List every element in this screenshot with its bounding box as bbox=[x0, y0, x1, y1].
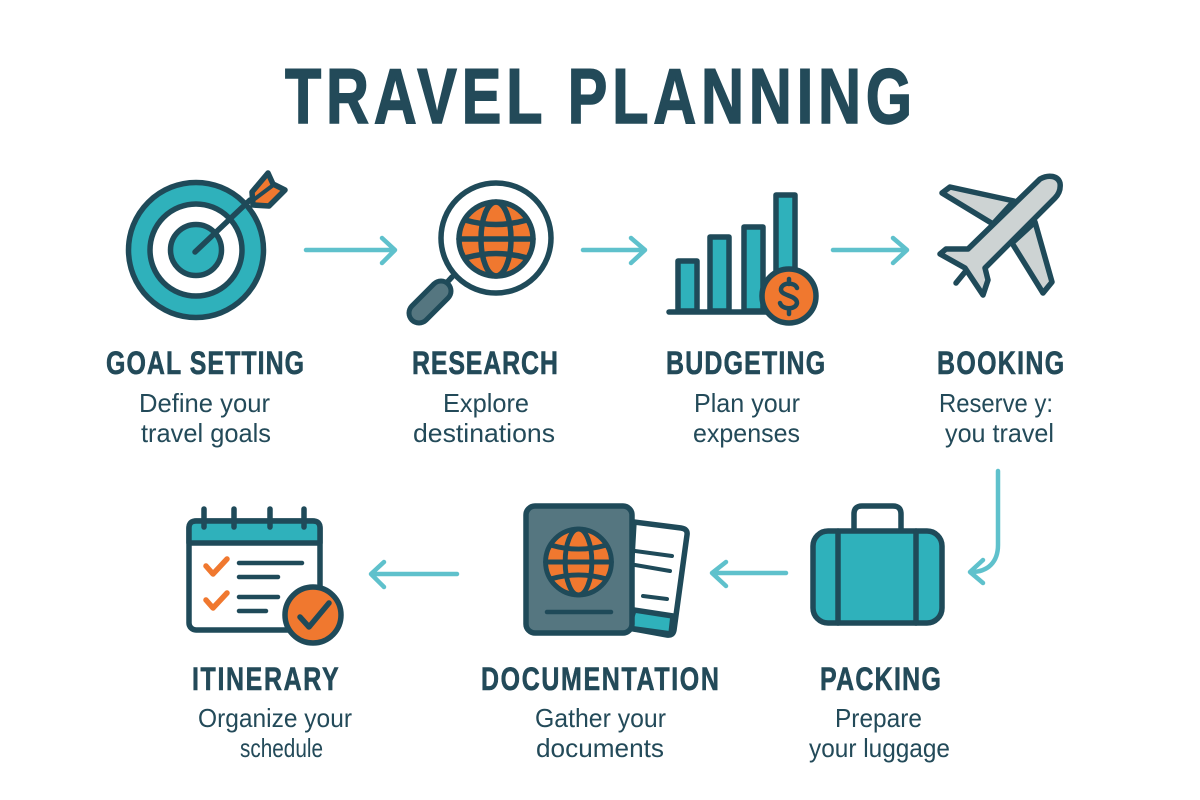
text: packing description bbox=[809, 703, 950, 763]
heading: itinerary: ITINERARY bbox=[192, 662, 339, 698]
icon: calendar with checklist bbox=[189, 509, 341, 643]
heading: documentation: DOCUMENTATION bbox=[481, 662, 719, 698]
heading: goal setting: GOAL SETTING bbox=[106, 346, 304, 382]
text: packing description: your luggage bbox=[809, 733, 950, 763]
text: documentation description bbox=[535, 703, 666, 763]
text: documentation description: Gather your bbox=[535, 703, 666, 733]
arrow: packing to documentation bbox=[712, 562, 786, 586]
icon: bar chart with coin bbox=[669, 195, 816, 323]
icon: target with arrow bbox=[128, 173, 285, 318]
heading: research: RESEARCH bbox=[412, 346, 558, 382]
text: research description bbox=[413, 388, 555, 448]
arrow: budgeting to booking bbox=[833, 238, 907, 263]
text: goal setting description: Define your bbox=[139, 388, 270, 418]
arrow: documentation to itinerary bbox=[371, 562, 457, 587]
arrow: booking to packing bbox=[970, 471, 998, 583]
text: research description: Explore bbox=[443, 388, 529, 418]
heading: budgeting: BUDGETING bbox=[666, 346, 825, 382]
title: TRAVEL PLANNING bbox=[285, 52, 912, 140]
text: budgeting description bbox=[693, 388, 800, 448]
heading: packing: PACKING bbox=[820, 662, 941, 698]
icon: magnifying glass with globe bbox=[419, 183, 551, 313]
text: research description: destinations bbox=[413, 418, 555, 448]
text: goal setting description: travel goals bbox=[141, 418, 271, 448]
icon: suitcase bbox=[813, 506, 942, 623]
text: booking description bbox=[939, 388, 1054, 448]
icon: passport and ticket bbox=[526, 506, 687, 635]
text: budgeting description: Plan your bbox=[694, 388, 800, 418]
text: itinerary description: schedule bbox=[240, 733, 323, 763]
icon: airplane bbox=[940, 176, 1060, 295]
text: documentation description: documents bbox=[536, 733, 664, 763]
text: booking description: you travel bbox=[945, 418, 1054, 448]
text: packing description: Prepare bbox=[835, 703, 922, 733]
arrow: goal setting to research bbox=[306, 238, 395, 263]
text: itinerary description: Organize your bbox=[198, 703, 352, 733]
heading: booking: BOOKING bbox=[937, 346, 1064, 382]
arrow: research to budgeting bbox=[583, 238, 645, 263]
text: goal setting description bbox=[139, 388, 271, 448]
text: budgeting description: expenses bbox=[693, 418, 800, 448]
text: booking description: Reserve y: bbox=[939, 388, 1053, 418]
text: itinerary description bbox=[198, 703, 352, 763]
